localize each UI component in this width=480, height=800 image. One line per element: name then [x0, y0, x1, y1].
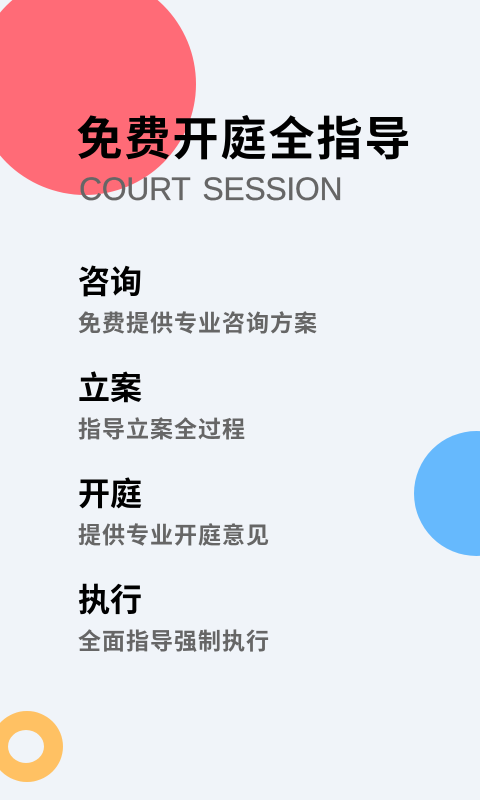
- heading: enforcement: 执行: [78, 582, 142, 618]
- description: hearing: 提供专业开庭意见: [78, 522, 270, 548]
- heading: filing: 立案: [78, 370, 142, 406]
- yellow ring: [0, 711, 63, 782]
- subtitle: COURT SESSION: [79, 171, 342, 207]
- description: enforcement: 全面指导强制执行: [78, 628, 270, 654]
- section: enforcement: [78, 582, 270, 654]
- description: consult: 免费提供专业咨询方案: [78, 310, 318, 336]
- heading: consult: 咨询: [78, 264, 142, 300]
- blue circle: [414, 431, 480, 556]
- section: filing: [78, 370, 246, 442]
- heading: hearing: 开庭: [78, 476, 142, 512]
- section: hearing: [78, 476, 270, 548]
- title: 免费开庭全指导: [76, 113, 412, 165]
- section: consult: [78, 264, 318, 336]
- red circle: [0, 0, 196, 195]
- description: filing: 指导立案全过程: [78, 416, 246, 442]
